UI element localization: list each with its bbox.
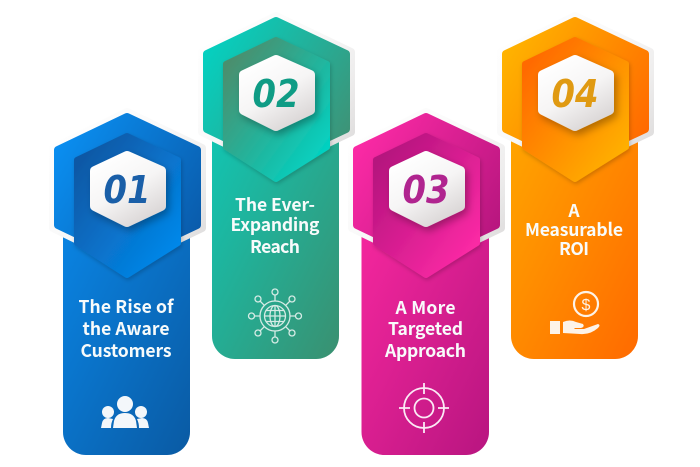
outer hexagon — [506, 21, 645, 162]
heading: Reach — [250, 234, 300, 259]
heading: A More — [394, 295, 456, 320]
outer hexagon halo — [202, 16, 351, 168]
outer hexagon — [58, 117, 197, 258]
inner hexagon — [525, 40, 626, 179]
number badge 02 — [244, 60, 310, 126]
panel: card 03 A More Targeted Approach — [352, 112, 501, 455]
outer hexagon — [357, 117, 496, 258]
number badge 01 — [95, 156, 161, 222]
number badge 03 — [394, 156, 460, 222]
outer hexagon halo — [352, 112, 501, 264]
inner hexagon — [376, 136, 477, 275]
outer hexagon — [207, 21, 346, 162]
inner hexagon — [77, 136, 178, 275]
card body — [212, 104, 339, 359]
icon: target — [399, 383, 449, 433]
heading: Customers — [80, 338, 172, 363]
heading: Targeted — [388, 316, 463, 341]
panel: card 01 The Rise of the Aware Customers — [53, 112, 202, 455]
heading: the Aware — [82, 316, 170, 341]
heading: The Ever- — [235, 192, 315, 217]
heading: ROI — [559, 236, 589, 261]
number badge 03: 03 — [402, 168, 450, 212]
heading: Measurable — [525, 217, 623, 242]
panel: card 04 A Measurable ROI — [501, 16, 650, 359]
icon: people — [101, 396, 149, 428]
card body — [63, 200, 190, 455]
icon: hand holding coin: $ — [582, 297, 591, 314]
icon: network globe — [248, 289, 302, 343]
number badge 02: 02 — [252, 72, 300, 116]
outer hexagon halo — [53, 112, 202, 264]
outer hexagon halo — [501, 16, 650, 168]
heading: A — [567, 198, 580, 223]
panel: card 02 The Ever-Expanding Reach — [202, 16, 351, 359]
heading: Expanding — [230, 212, 320, 237]
heading: The Rise of — [78, 294, 175, 319]
card body — [362, 200, 489, 455]
icon: hand holding coin — [550, 292, 600, 334]
card body — [511, 104, 638, 359]
heading: Approach — [384, 338, 466, 363]
number badge 04: 04 — [552, 72, 598, 116]
number badge 04 — [543, 60, 609, 126]
number badge 01: 01 — [104, 168, 150, 212]
inner hexagon — [226, 40, 327, 179]
